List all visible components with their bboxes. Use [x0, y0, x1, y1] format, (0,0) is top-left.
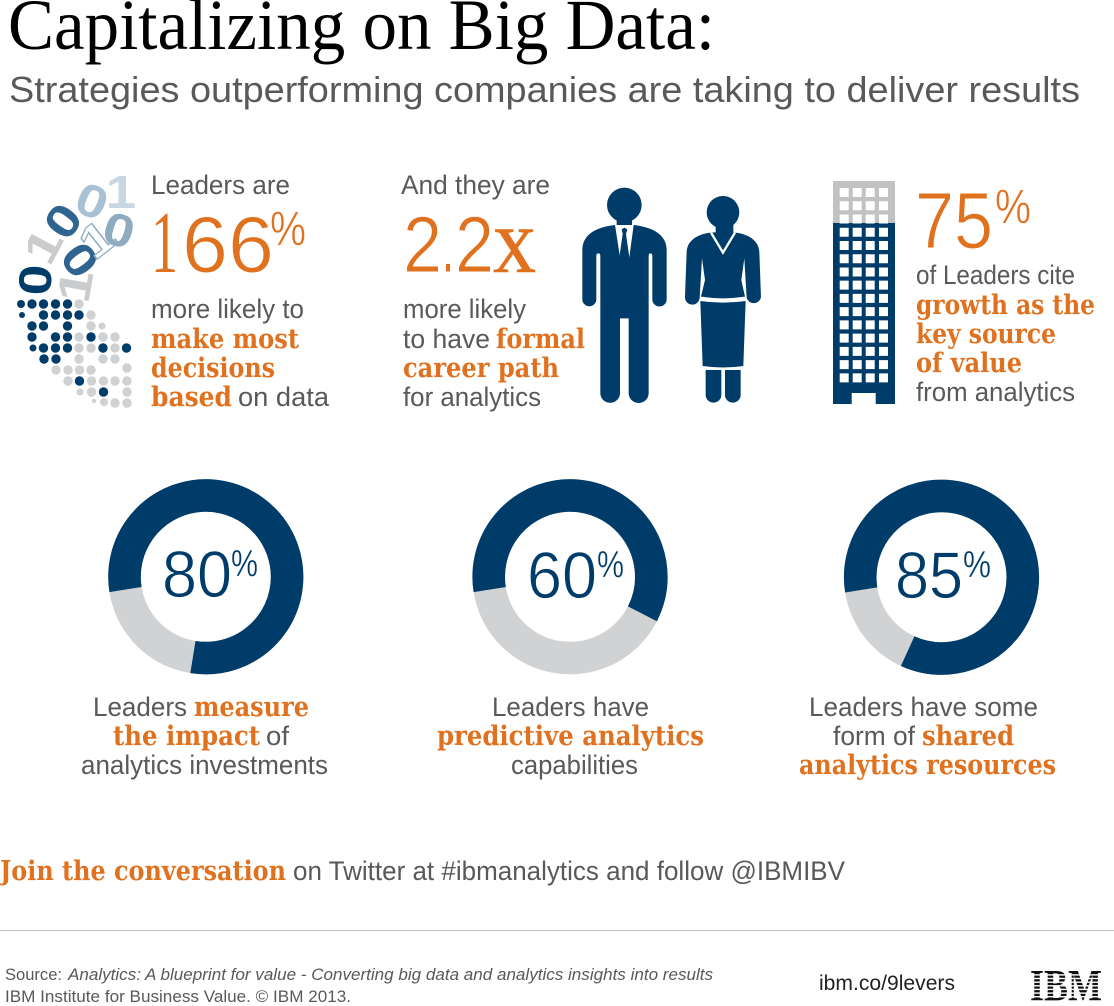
- icon: binary digits and data dots: 0: [97, 201, 141, 259]
- caption: Leaders have some: [809, 692, 1038, 722]
- donut chart: 80%: [113, 484, 299, 670]
- panel: 85% shared resources: [799, 484, 1056, 781]
- icon: binary digits and data dots: 1: [106, 166, 136, 218]
- number: 85%: %: [963, 544, 991, 586]
- caption: predictive analytics: [437, 721, 704, 752]
- number: 80%: 80: [162, 537, 232, 611]
- panel: 80% measure impact: [81, 484, 328, 780]
- call to action: Join the conversation: [0, 856, 286, 887]
- text: of leaders cite growth as the key source of value from analytics: of Leaders cite: [916, 260, 1075, 290]
- number: 166%: 66: [182, 200, 274, 289]
- text: more likely to have formal career path for analytics: more likely: [403, 294, 526, 324]
- text: more likely to make most decisions based on data: decisions: [151, 353, 275, 384]
- number: 60%: %: [597, 544, 624, 586]
- number: 75%: 75: [915, 176, 993, 265]
- number: 2.2x: x: [493, 190, 536, 292]
- number: 85%: 85: [895, 538, 963, 612]
- source note: Source:: [5, 965, 62, 984]
- caption: capabilities: [511, 750, 638, 780]
- text: more likely to have formal career path for analytics: [403, 294, 585, 412]
- icon: binary digits and data dots: [9, 166, 141, 408]
- text: more likely to make most decisions based on data: based: [151, 382, 232, 413]
- panel: 2.2x career path: [401, 170, 761, 412]
- number: 2.2x: 2: [455, 200, 494, 289]
- icon: businessman: [582, 188, 667, 403]
- text: of leaders cite growth as the key source of value from analytics: key source: [916, 319, 1056, 350]
- icon: binary digits and data dots: 0: [9, 263, 62, 297]
- source note: IBM Institute for Business Value. © IBM 2013.: [5, 987, 351, 1006]
- caption: of: [266, 721, 289, 751]
- number: 60%: 60: [527, 538, 597, 612]
- number: 80%: %: [231, 543, 258, 585]
- caption: Leaders have: [492, 692, 649, 722]
- text: more likely to make most decisions based on data: on data: [238, 382, 330, 412]
- caption: [799, 692, 1056, 781]
- source note: [5, 965, 713, 1006]
- icon: binary digits and data dots: 0: [33, 194, 93, 249]
- call to action: [0, 856, 845, 887]
- caption: the impact: [113, 721, 260, 752]
- text: more likely to have formal career path for analytics: formal: [496, 324, 585, 355]
- icon: binary digits and data dots: 1: [69, 210, 126, 270]
- donut chart: 85%: [848, 484, 1035, 670]
- number: 166%: 1: [151, 195, 178, 292]
- caption: shared: [922, 721, 1014, 752]
- subtitle: Strategies outperforming companies are taking to deliver results: [9, 69, 1080, 110]
- text: of leaders cite growth as the key source of value from analytics: from analytics: [916, 377, 1075, 407]
- text: and they are: And they are: [401, 170, 550, 200]
- caption: form of: [833, 721, 915, 751]
- icon: businesswoman: [685, 196, 761, 403]
- short link: ibm.co/9levers: [819, 972, 955, 995]
- caption: measure: [194, 692, 309, 723]
- number: 2.2x: 2: [403, 200, 442, 289]
- text: of leaders cite growth as the key source of value from analytics: of value: [916, 348, 1022, 379]
- icon: binary digits and data dots: 1: [14, 220, 74, 273]
- panel: 60% predictive analytics: [437, 484, 704, 780]
- text: more likely to have formal career path for analytics: career path: [403, 353, 559, 384]
- caption: [81, 692, 328, 780]
- icon: binary digits and data dots: 0: [50, 232, 110, 288]
- text: more likely to have formal career path for analytics: for analytics: [403, 382, 541, 412]
- panel: 75% growth: [833, 176, 1095, 407]
- donut chart: 60%: [477, 484, 663, 670]
- text: more likely to have formal career path for analytics: to have: [403, 324, 490, 354]
- number: 166%: %: [270, 203, 306, 256]
- number: 75%: %: [995, 181, 1031, 234]
- text: more likely to make most decisions based on data: more likely to: [151, 294, 304, 324]
- number: 166%: [151, 195, 306, 292]
- caption: analytics investments: [81, 750, 328, 780]
- text: more likely to make most decisions based on data: make most: [151, 324, 299, 355]
- icon: office building: [833, 181, 895, 404]
- caption: analytics resources: [799, 750, 1056, 781]
- icon: binary digits and data dots: 0: [68, 171, 116, 231]
- source note: Analytics: A blueprint for value - Converting big data and analytics insights into results: [67, 965, 713, 984]
- text: of leaders cite growth as the key source of value from analytics: [916, 260, 1095, 407]
- text: leaders are: Leaders are: [151, 170, 290, 200]
- text: more likely to make most decisions based on data: [151, 294, 330, 413]
- caption: Leaders: [93, 692, 187, 722]
- caption: [437, 692, 704, 780]
- panel: 166% leaders: [9, 166, 330, 413]
- call to action: on Twitter at #ibmanalytics and follow @IBMIBV: [293, 856, 845, 886]
- icon: binary digits and data dots: 1: [48, 266, 104, 306]
- number: 2.2x: .: [441, 200, 455, 289]
